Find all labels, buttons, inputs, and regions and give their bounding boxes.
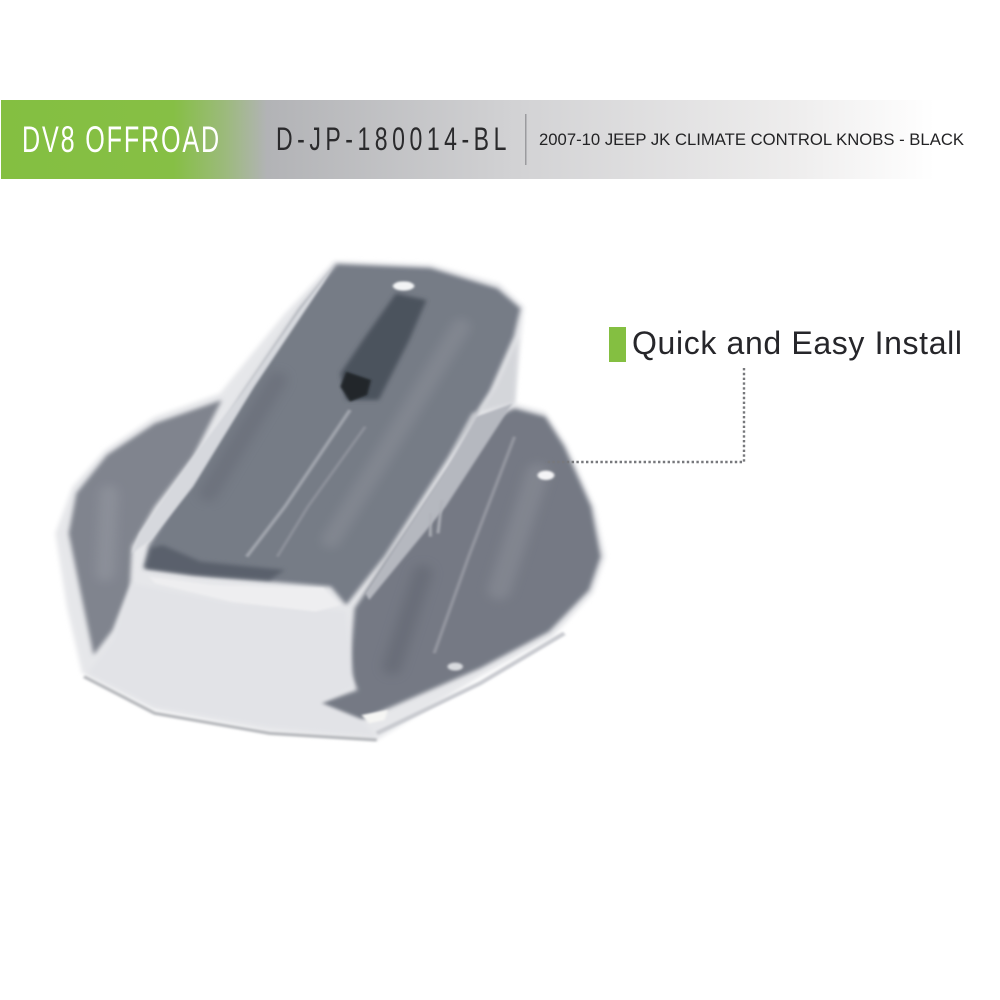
base lower left shade: [84, 677, 377, 740]
centre groove lines: [247, 410, 350, 557]
callout leader line: [545, 368, 744, 462]
callout marker: [609, 327, 626, 362]
knob top face: [143, 264, 520, 605]
header bar: [1, 100, 964, 179]
part number: D-JP-180014-BL: [276, 121, 506, 157]
base highlights: [538, 471, 554, 480]
knob front shadow edge: [145, 545, 285, 580]
product title: 2007-10 JEEP JK CLIMATE CONTROL KNOBS - BLACK: [539, 131, 964, 149]
right edge highlight strip: [449, 337, 518, 457]
callout text: Quick and Easy Install: [632, 325, 962, 361]
side groove: [434, 437, 515, 653]
left edge highlight strip: [132, 264, 335, 553]
header divider: [525, 114, 526, 165]
brand name: DV8 OFFROAD: [22, 118, 219, 160]
front face: [88, 583, 377, 737]
surface mottling: [94, 327, 538, 667]
slot highlight: [393, 281, 414, 291]
base right dark section: [319, 408, 601, 720]
base left dark section: [69, 400, 222, 655]
top front lip highlight: [149, 577, 340, 612]
product image: climate control knob: [55, 261, 606, 740]
slot: [340, 293, 427, 400]
knob silhouette: [55, 261, 606, 740]
base lower right rim: [377, 633, 564, 733]
